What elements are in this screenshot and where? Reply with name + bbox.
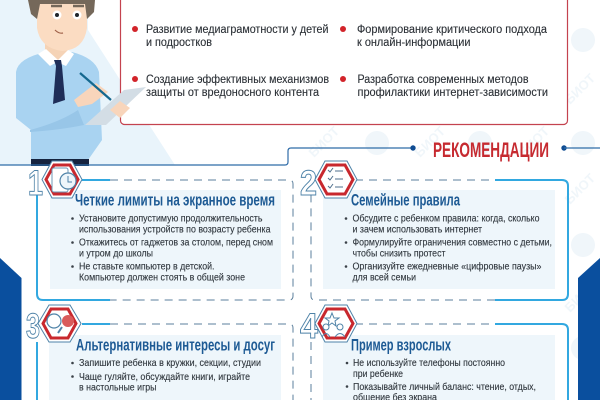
- side shape: left blue: [0, 258, 22, 400]
- watermark pattern: БИОТ: [516, 123, 552, 160]
- card 1 list: [71, 213, 273, 284]
- card 3 list: [71, 357, 261, 394]
- card 3 list: Запишите ребенка в кружки, секции, студии: [79, 357, 261, 369]
- side shape: right blue: [578, 258, 600, 400]
- card 1 list: Не ставьте компьютер в детской.: [79, 261, 214, 273]
- card 1 list: использования устройств по возрасту ребенка: [79, 224, 271, 236]
- card 4 list: Не используйте телефоны постоянно: [353, 357, 505, 369]
- card 2 list: чтобы снизить протест: [352, 248, 446, 260]
- card 3 list: Чаще гуляйте, обсуждайте книги, играйте: [79, 371, 250, 383]
- watermark pattern: БИОТ: [562, 170, 598, 207]
- card 2 list: для всей семьи: [352, 272, 416, 284]
- watermark pattern: БИОТ: [306, 123, 342, 160]
- card 3 list: в настольные игры: [79, 382, 156, 394]
- goal: prevention methods: профилактики интернет-зависимости: [358, 87, 548, 99]
- card 1 icon: phone and clock: [42, 161, 82, 198]
- watermark pattern: [306, 28, 598, 360]
- card 2 list: Формулируйте ограничения совместно с детьми,: [352, 237, 552, 249]
- watermark pattern: БИОТ: [562, 278, 598, 315]
- card 3 number: 3: [26, 307, 40, 346]
- card 2 list: Обсудите с ребенком правила: когда, сколько: [352, 213, 540, 225]
- card 2 list: Организуйте ежедневные «цифровые паузы»: [352, 261, 542, 273]
- card 1 list: и утром до школы: [79, 248, 153, 260]
- card 4 list: [346, 357, 536, 400]
- card 2: family rules: [300, 161, 568, 300]
- illustration: man with tablet: [16, 0, 146, 166]
- goal: media literacy: [132, 24, 328, 49]
- card 4 list: Показывайте личный баланс: чтение, отдых,: [353, 381, 536, 393]
- card 1 list: Откажитесь от гаджетов за столом, перед сном: [79, 237, 273, 249]
- connector line right: [561, 145, 600, 151]
- goal: media literacy: и подростков: [146, 37, 212, 49]
- goal: critical approach: к онлайн-информации: [357, 37, 470, 49]
- watermark pattern: БИОТ: [412, 123, 448, 160]
- goal: critical approach: [340, 24, 548, 49]
- card 1: screen time limits: [28, 161, 293, 300]
- card 1 list: Компьютер должен стоять в общей зоне: [79, 272, 245, 284]
- card 2 heading: Семейные правила: [351, 191, 460, 210]
- connector line to heading: [0, 148, 412, 165]
- card 4 list: при ребенке: [353, 368, 403, 380]
- card 2 list: [345, 213, 552, 284]
- card 1 heading: Четкие лимиты на экранное время: [75, 191, 275, 210]
- goal: protection mechanisms: защиты от вредоносного контента: [146, 87, 320, 99]
- card 2 icon: checklist: [315, 161, 357, 198]
- card 4: adult example: [300, 305, 568, 400]
- goal: critical approach: Формирование критического подхода: [357, 24, 548, 36]
- card 1 list: Установите допустимую продолжительность: [79, 213, 263, 225]
- card 1 number: 1: [28, 164, 43, 203]
- card 2 list: и зачем использовать интернет: [352, 224, 482, 236]
- card 3 icon: ball and racket: [38, 305, 81, 342]
- card 3 heading: Альтернативные интересы и досуг: [76, 336, 275, 355]
- goal: prevention methods: [340, 74, 548, 99]
- card 4 icon: star and people: [315, 305, 357, 342]
- goal: protection mechanisms: Создание эффективных механизмов: [146, 74, 329, 86]
- background: pale blue area with light beam: [0, 0, 175, 165]
- card 2 number: 2: [300, 164, 317, 203]
- watermark pattern: БИОТ: [562, 70, 598, 107]
- card 4 heading: Пример взрослых: [351, 336, 451, 355]
- goal: protection mechanisms: [132, 74, 329, 99]
- card 4 number: 4: [300, 307, 318, 346]
- card 3: alternative interests: [26, 305, 293, 400]
- panel: goals: [120, 0, 568, 124]
- goal: prevention methods: Разработка современных методов: [358, 74, 528, 86]
- goal: media literacy: Развитие медиаграмотности у детей: [146, 24, 328, 36]
